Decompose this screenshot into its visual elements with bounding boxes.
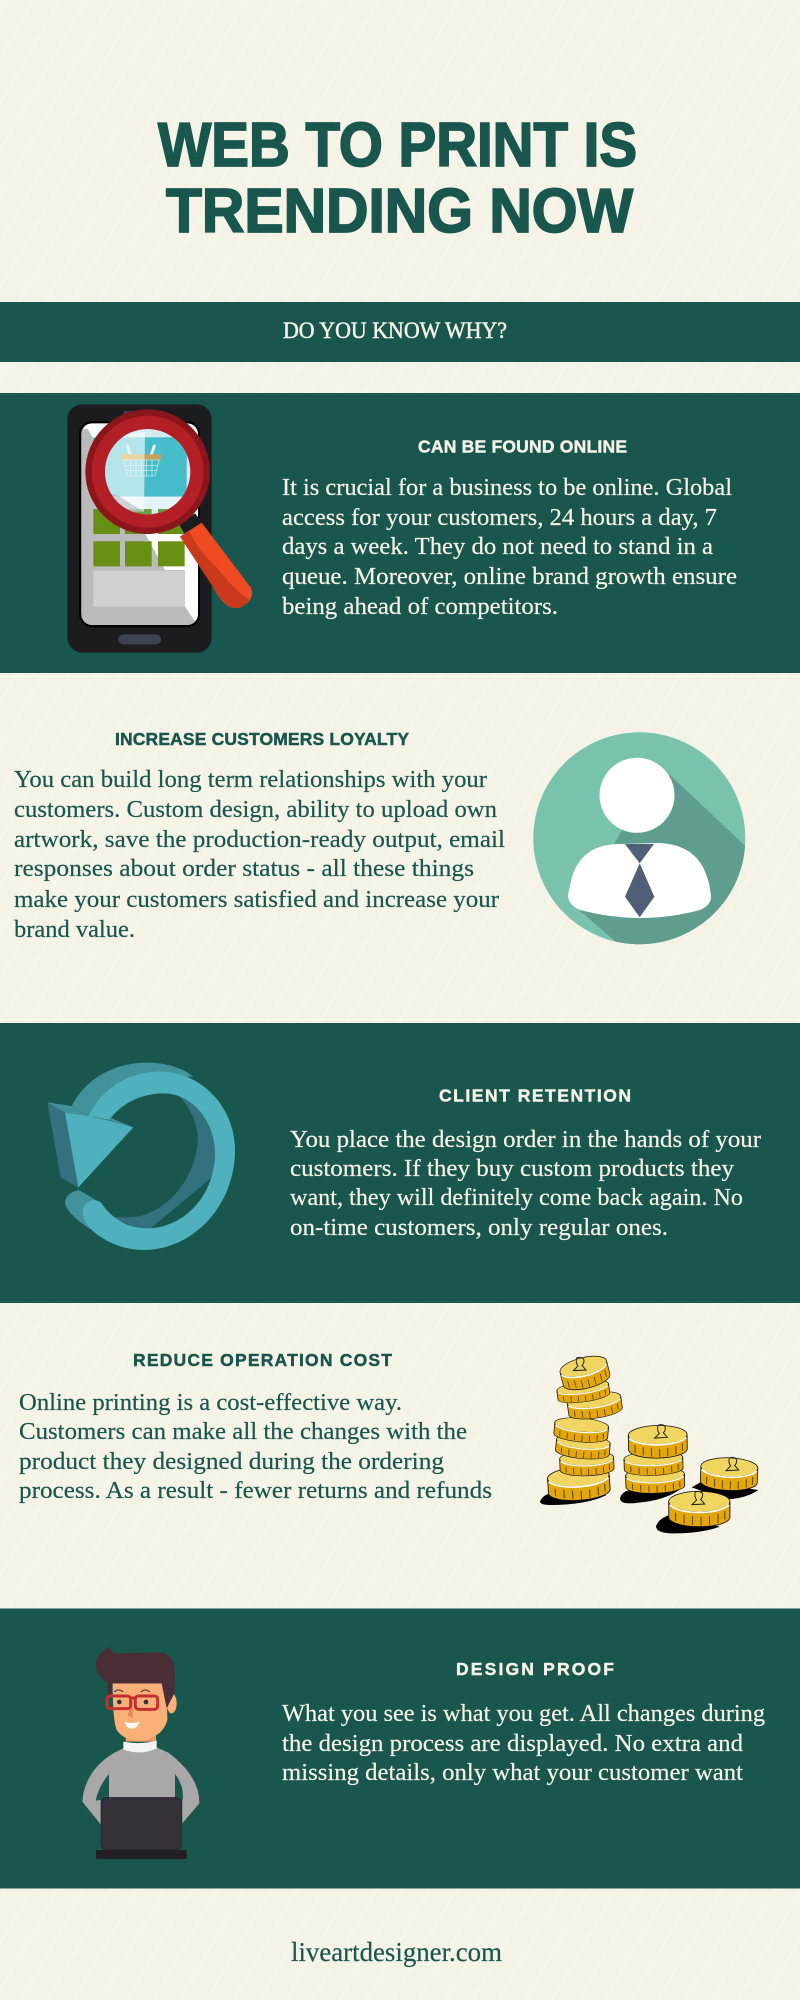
text block: missing details, only what your customer want [282, 1760, 743, 1786]
text block: artwork, save the production-ready output, email [14, 827, 505, 853]
text block [290, 1127, 761, 1241]
heading: DESIGN PROOF [456, 1659, 614, 1679]
icon: phone with magnifying glass [67, 404, 252, 653]
text block [14, 767, 505, 943]
text block: being ahead of competitors. [282, 594, 558, 620]
footer: website: liveartdesigner.com [291, 1937, 502, 1967]
heading: REDUCE OPERATION COST [133, 1350, 392, 1370]
text block: Online printing is a cost-effective way. [19, 1390, 402, 1416]
text block: customers. If they buy custom products they [290, 1156, 734, 1182]
heading: INCREASE CUSTOMERS LOYALTY [115, 729, 409, 749]
text block: product they designed during the ordering [19, 1449, 444, 1475]
icon: designer with laptop [82, 1646, 199, 1859]
text block [282, 475, 737, 620]
text block: responses about order status - all these things [14, 856, 474, 882]
icon: shopping basket [121, 446, 161, 476]
panel: increase customers loyalty [14, 729, 760, 960]
text block: Customers can make all the changes with the [19, 1419, 467, 1445]
text block: It is crucial for a business to be online. Global [282, 475, 732, 501]
icon: circular return arrow [47, 1063, 235, 1250]
icon: stacks of gold coins [540, 1352, 758, 1533]
panel: client retention [0, 1023, 800, 1303]
text block: the design process are displayed. No extra and [282, 1731, 743, 1757]
icon: customer avatar [533, 732, 746, 944]
text block: brand value. [14, 917, 135, 943]
panel: design proof [0, 1608, 800, 1888]
text block: make your customers satisfied and increase your [14, 887, 499, 913]
text block [282, 1701, 765, 1786]
text block: queue. Moreover, online brand growth ensure [282, 564, 737, 590]
text block: process. As a result - fewer returns and refunds [19, 1478, 492, 1504]
title: WEB TO PRINT IS [158, 111, 637, 180]
text block: You place the design order in the hands of your [290, 1127, 761, 1153]
panel: reduce operation cost [19, 1350, 758, 1533]
text block: You can build long term relationships with your [14, 767, 487, 793]
text block: days a week. They do not need to stand in a [282, 534, 713, 560]
panel: can be found online [0, 393, 800, 673]
heading: CLIENT RETENTION [439, 1086, 631, 1106]
text block: customers. Custom design, ability to upload own [14, 797, 497, 823]
text block: access for your customers, 24 hours a day, 7 [282, 505, 717, 531]
heading: CAN BE FOUND ONLINE [418, 437, 627, 457]
text block: on-time customers, only regular ones. [290, 1215, 668, 1241]
banner: do you know why [0, 302, 800, 362]
banner: do you know why: DO YOU KNOW WHY? [283, 318, 507, 343]
text block: want, they will definitely come back again. No [290, 1185, 743, 1211]
title: TRENDING NOW [166, 177, 633, 246]
text block [19, 1390, 492, 1504]
text block: What you see is what you get. All changes during [282, 1701, 765, 1727]
title [158, 111, 637, 246]
